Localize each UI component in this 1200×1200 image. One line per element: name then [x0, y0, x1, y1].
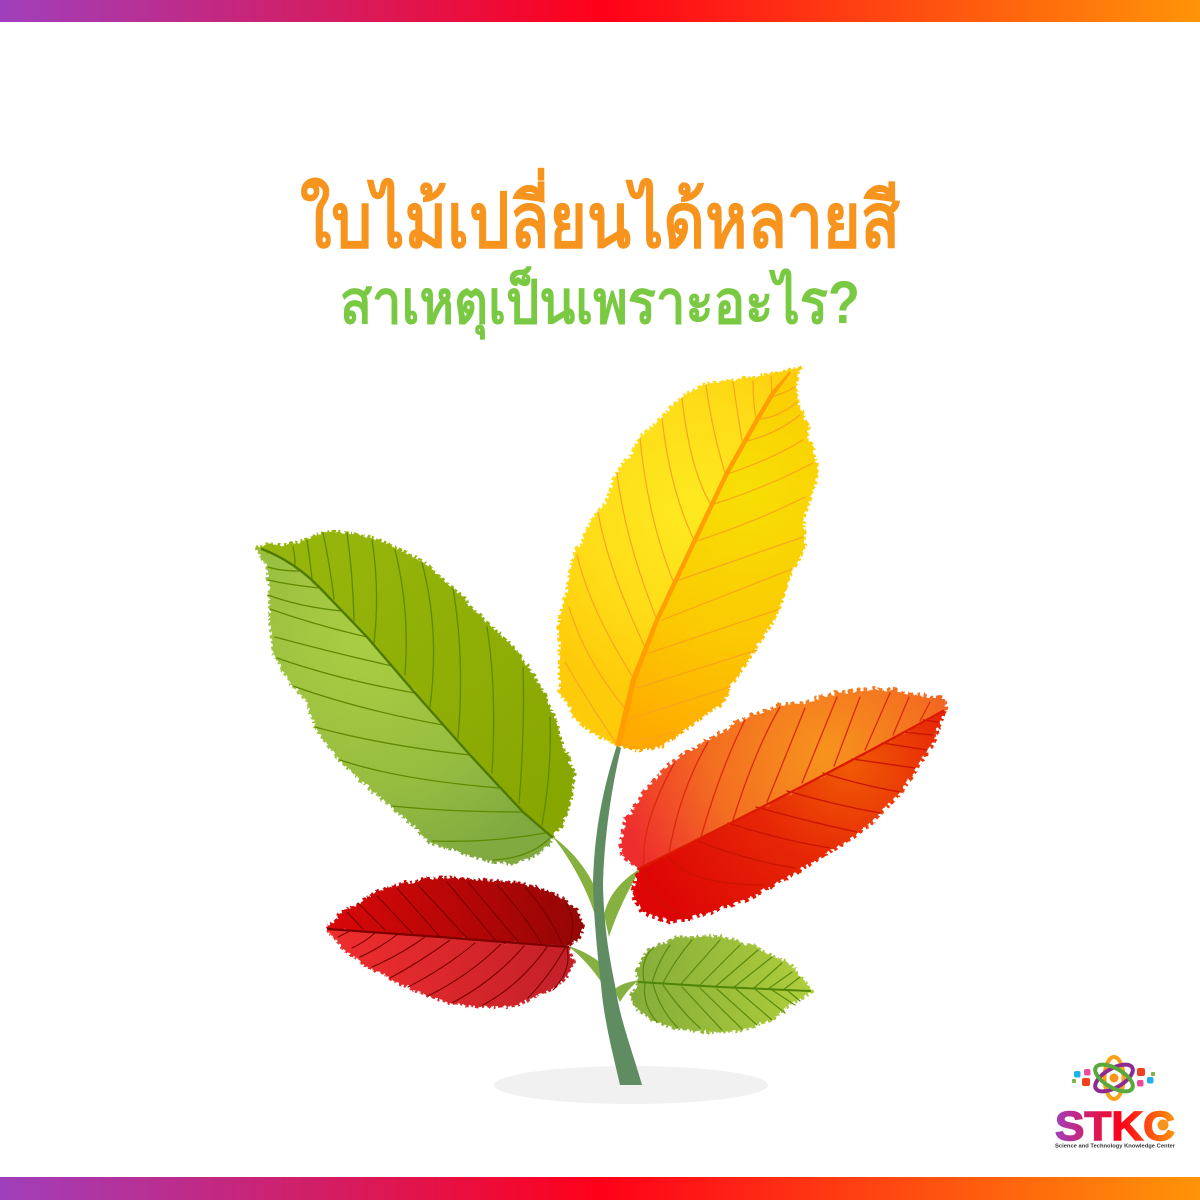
orange leaf lower veins: [645, 720, 938, 917]
yellow leaf body: [559, 367, 818, 750]
green leaf midrib: [262, 549, 552, 837]
small green leaf: [631, 937, 812, 1032]
top gradient bar: [0, 0, 1200, 22]
red leaf body: [327, 878, 583, 1006]
orange leaf side veins: [644, 693, 930, 866]
small green leaf side veins: [643, 940, 800, 1030]
STKC logo: [1055, 1057, 1176, 1150]
green leaf: [255, 532, 574, 863]
stem: [593, 745, 642, 1085]
ground shadow: [494, 1066, 768, 1104]
orange leaf midrib: [640, 711, 943, 868]
red leaf: [327, 878, 583, 1006]
red leaf side veins: [338, 882, 573, 1005]
small green leaf body: [631, 937, 812, 1032]
yellow leaf midrib: [615, 371, 791, 746]
logo wordmark: STKC: [1055, 1103, 1175, 1149]
logo C dot: [1158, 1120, 1168, 1130]
logo atom icon: [1091, 1057, 1137, 1099]
logo dots: [1072, 1068, 1155, 1086]
leaf petioles: [552, 836, 641, 1002]
small green leaf midrib: [639, 982, 810, 991]
title line 2: สาเหตุเป็นเพราะอะไร?: [340, 266, 860, 340]
logo subtitle: Science and Technology Knowledge Center: [1055, 1144, 1176, 1150]
bottom gradient bar: [0, 1177, 1200, 1200]
orange leaf: [622, 690, 945, 921]
green leaf side veins: [268, 533, 550, 860]
yellow leaf side veins: [565, 377, 813, 743]
yellow leaf: [559, 367, 818, 750]
green leaf body: [255, 532, 574, 863]
title: [300, 167, 901, 340]
title line 1: ใบไม้เปลี่ยนได้หลายสี: [300, 167, 901, 264]
orange leaf body: [622, 690, 945, 921]
red leaf midrib: [328, 929, 568, 947]
